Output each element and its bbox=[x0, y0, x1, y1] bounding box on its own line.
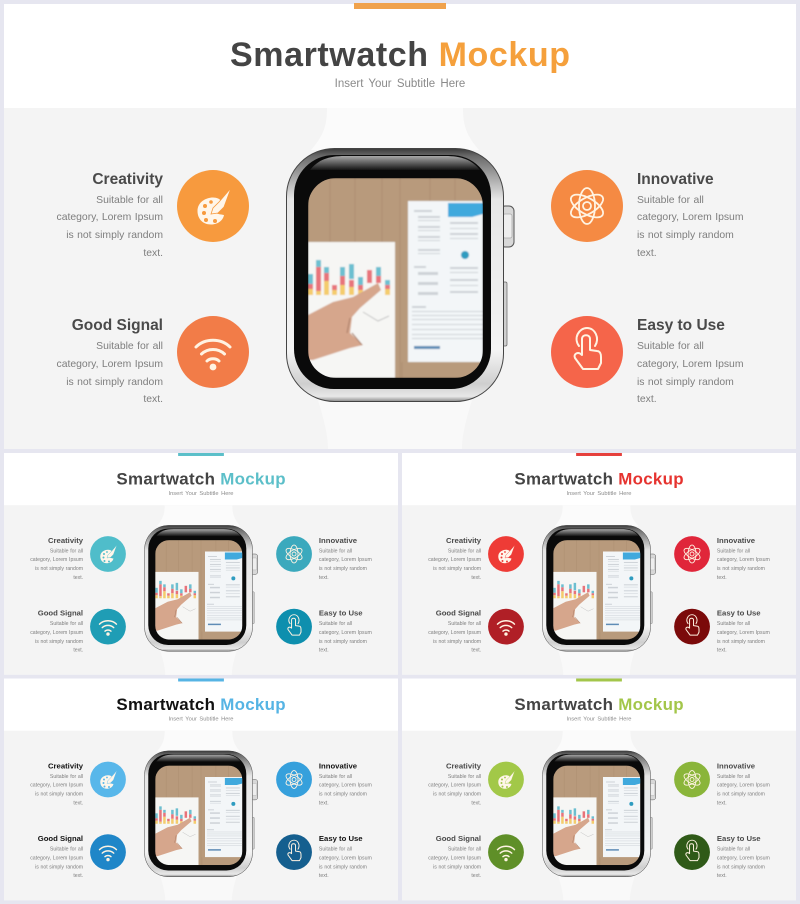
feature: Easy to Use: text. bbox=[717, 648, 727, 654]
feature: Easy to Use: Easy to Use bbox=[637, 317, 725, 334]
feature: Innovative: Innovative bbox=[717, 536, 756, 545]
feature: Creativity: Creativity bbox=[92, 171, 163, 188]
feature: Good Signal: category, Lorem Ipsum bbox=[428, 630, 481, 636]
feature: Creativity: is not simply random bbox=[35, 791, 83, 797]
feature: Innovative: is not simply random bbox=[717, 566, 765, 572]
feature: Innovative: category, Lorem Ipsum bbox=[717, 782, 770, 788]
feature: Creativity: Suitable for all bbox=[50, 774, 83, 780]
slide: blue small bbox=[4, 678, 398, 900]
feature: Good Signal: Good Signal bbox=[436, 834, 481, 843]
feature: Creativity: Creativity bbox=[48, 536, 84, 545]
feature: Innovative: Suitable for all bbox=[717, 774, 750, 780]
feature: Innovative: Innovative bbox=[319, 536, 358, 545]
feature: Good Signal bbox=[56, 316, 249, 405]
feature: Good Signal: is not simply random bbox=[66, 377, 163, 388]
feature: Good Signal: is not simply random bbox=[433, 865, 481, 871]
feature: Innovative: Innovative bbox=[637, 171, 714, 188]
feature: Good Signal: Good Signal bbox=[72, 317, 163, 334]
feature: Good Signal bbox=[428, 609, 524, 654]
feature: Innovative: Suitable for all bbox=[319, 774, 352, 780]
feature: Innovative: category, Lorem Ipsum bbox=[319, 557, 372, 563]
feature: Creativity: category, Lorem Ipsum bbox=[56, 212, 163, 223]
feature: Good Signal bbox=[428, 834, 524, 879]
slide: red small bbox=[402, 453, 796, 675]
feature: Creativity: Suitable for all bbox=[50, 549, 83, 555]
feature: Good Signal: is not simply random bbox=[35, 865, 83, 871]
feature: Easy to Use: Suitable for all bbox=[637, 341, 704, 352]
feature: Easy to Use: is not simply random bbox=[717, 639, 765, 645]
feature: Innovative bbox=[674, 762, 770, 806]
feature: Good Signal bbox=[30, 609, 126, 654]
feature: Creativity bbox=[428, 762, 524, 806]
slide: green small bbox=[402, 678, 796, 900]
title: Smartwatch Mockup bbox=[230, 36, 570, 74]
feature: Good Signal: text. bbox=[471, 873, 481, 879]
feature: Innovative bbox=[276, 536, 372, 581]
feature: Good Signal: is not simply random bbox=[35, 639, 83, 645]
feature: Creativity: text. bbox=[143, 248, 163, 259]
feature: Easy to Use bbox=[276, 609, 372, 654]
feature: Good Signal: category, Lorem Ipsum bbox=[30, 630, 83, 636]
smartwatch bbox=[145, 731, 258, 900]
smartwatch bbox=[145, 505, 258, 675]
title: Smartwatch Mockup bbox=[116, 695, 286, 714]
feature: Creativity: category, Lorem Ipsum bbox=[428, 557, 481, 563]
feature: Easy to Use bbox=[276, 834, 372, 879]
feature: Easy to Use bbox=[674, 609, 770, 654]
feature: Innovative: is not simply random bbox=[319, 566, 367, 572]
feature: Innovative: Innovative bbox=[717, 762, 756, 771]
feature: Innovative: Suitable for all bbox=[319, 549, 352, 555]
title: Smartwatch Mockup bbox=[514, 695, 684, 714]
feature: Innovative: text. bbox=[319, 800, 329, 806]
feature: Innovative: category, Lorem Ipsum bbox=[319, 782, 372, 788]
feature: Creativity: Suitable for all bbox=[96, 195, 163, 206]
smartwatch bbox=[543, 505, 656, 675]
feature: Good Signal: text. bbox=[73, 648, 83, 654]
slide: teal small bbox=[4, 453, 398, 675]
feature: Creativity: Creativity bbox=[446, 536, 482, 545]
feature: Easy to Use: is not simply random bbox=[319, 639, 367, 645]
feature: Innovative: category, Lorem Ipsum bbox=[717, 557, 770, 563]
feature: Innovative: text. bbox=[717, 800, 727, 806]
feature: Innovative: is not simply random bbox=[717, 791, 765, 797]
feature: Creativity bbox=[30, 536, 126, 581]
feature: Innovative: category, Lorem Ipsum bbox=[637, 212, 744, 223]
feature: Good Signal: Good Signal bbox=[38, 609, 83, 618]
feature: Easy to Use: is not simply random bbox=[319, 865, 367, 871]
feature: Easy to Use: Easy to Use bbox=[319, 834, 363, 843]
feature: Easy to Use: text. bbox=[319, 873, 329, 879]
feature: Creativity: is not simply random bbox=[433, 566, 481, 572]
feature: Creativity: Suitable for all bbox=[448, 549, 481, 555]
feature: Innovative: Suitable for all bbox=[637, 195, 704, 206]
feature: Good Signal: text. bbox=[73, 873, 83, 879]
feature: Creativity: is not simply random bbox=[66, 230, 163, 241]
feature: Creativity: Creativity bbox=[48, 762, 84, 771]
feature: Good Signal: Suitable for all bbox=[448, 847, 481, 853]
feature: Creativity: is not simply random bbox=[433, 791, 481, 797]
subtitle: Insert Your Subtitle Here bbox=[169, 716, 234, 722]
feature: Good Signal: text. bbox=[143, 394, 163, 405]
feature: Creativity: text. bbox=[73, 575, 83, 581]
feature: Easy to Use: category, Lorem Ipsum bbox=[637, 359, 744, 370]
feature: Good Signal: Good Signal bbox=[38, 834, 83, 843]
feature: Innovative bbox=[276, 762, 372, 806]
feature: Good Signal: Suitable for all bbox=[50, 621, 83, 627]
feature: Good Signal: Suitable for all bbox=[448, 621, 481, 627]
feature: Easy to Use: text. bbox=[637, 394, 657, 405]
feature: Creativity: category, Lorem Ipsum bbox=[428, 782, 481, 788]
feature: Good Signal: is not simply random bbox=[433, 639, 481, 645]
feature: Good Signal bbox=[30, 834, 126, 879]
feature: Creativity: category, Lorem Ipsum bbox=[30, 782, 83, 788]
feature: Easy to Use: category, Lorem Ipsum bbox=[319, 856, 372, 862]
feature: Innovative: text. bbox=[637, 248, 657, 259]
feature: Creativity: text. bbox=[471, 575, 481, 581]
feature: Easy to Use: text. bbox=[319, 648, 329, 654]
subtitle: Insert Your Subtitle Here bbox=[169, 491, 234, 497]
feature: Innovative bbox=[674, 536, 770, 581]
slide: orange large bbox=[4, 3, 796, 449]
feature: Innovative: is not simply random bbox=[319, 791, 367, 797]
feature: Good Signal: Good Signal bbox=[436, 609, 481, 618]
smartwatch bbox=[286, 108, 514, 449]
feature: Innovative: text. bbox=[717, 575, 727, 581]
smartwatch bbox=[543, 731, 656, 900]
subtitle: Insert Your Subtitle Here bbox=[567, 491, 632, 497]
feature: Innovative: text. bbox=[319, 575, 329, 581]
feature: Easy to Use bbox=[551, 316, 744, 405]
feature: Creativity: text. bbox=[73, 800, 83, 806]
feature: Easy to Use: Suitable for all bbox=[319, 847, 352, 853]
feature: Creativity: Creativity bbox=[446, 762, 482, 771]
feature: Good Signal: Suitable for all bbox=[50, 847, 83, 853]
feature: Easy to Use: Easy to Use bbox=[717, 609, 761, 618]
feature: Good Signal: category, Lorem Ipsum bbox=[30, 856, 83, 862]
feature: Creativity bbox=[56, 170, 249, 259]
feature: Good Signal: text. bbox=[471, 648, 481, 654]
feature: Easy to Use: category, Lorem Ipsum bbox=[319, 630, 372, 636]
feature: Easy to Use: Suitable for all bbox=[319, 621, 352, 627]
feature: Good Signal: category, Lorem Ipsum bbox=[428, 856, 481, 862]
feature: Easy to Use: Suitable for all bbox=[717, 847, 750, 853]
title: Smartwatch Mockup bbox=[116, 469, 286, 488]
feature: Creativity bbox=[428, 536, 524, 581]
feature: Easy to Use: is not simply random bbox=[637, 377, 734, 388]
feature: Creativity: text. bbox=[471, 800, 481, 806]
feature: Innovative: is not simply random bbox=[637, 230, 734, 241]
feature: Innovative: Suitable for all bbox=[717, 549, 750, 555]
feature: Good Signal: category, Lorem Ipsum bbox=[56, 359, 163, 370]
feature: Creativity: category, Lorem Ipsum bbox=[30, 557, 83, 563]
title: Smartwatch Mockup bbox=[514, 469, 684, 488]
feature: Easy to Use: category, Lorem Ipsum bbox=[717, 630, 770, 636]
feature: Easy to Use: is not simply random bbox=[717, 865, 765, 871]
subtitle: Insert Your Subtitle Here bbox=[567, 716, 632, 722]
subtitle: Insert Your Subtitle Here bbox=[335, 78, 465, 90]
feature: Easy to Use: Easy to Use bbox=[717, 834, 761, 843]
feature: Easy to Use: Suitable for all bbox=[717, 621, 750, 627]
feature: Easy to Use: Easy to Use bbox=[319, 609, 363, 618]
feature: Innovative bbox=[551, 170, 744, 259]
feature: Good Signal: Suitable for all bbox=[96, 341, 163, 352]
feature: Creativity: Suitable for all bbox=[448, 774, 481, 780]
feature: Creativity bbox=[30, 762, 126, 806]
feature: Creativity: is not simply random bbox=[35, 566, 83, 572]
feature: Innovative: Innovative bbox=[319, 762, 358, 771]
feature: Easy to Use: category, Lorem Ipsum bbox=[717, 856, 770, 862]
feature: Easy to Use: text. bbox=[717, 873, 727, 879]
feature: Easy to Use bbox=[674, 834, 770, 879]
